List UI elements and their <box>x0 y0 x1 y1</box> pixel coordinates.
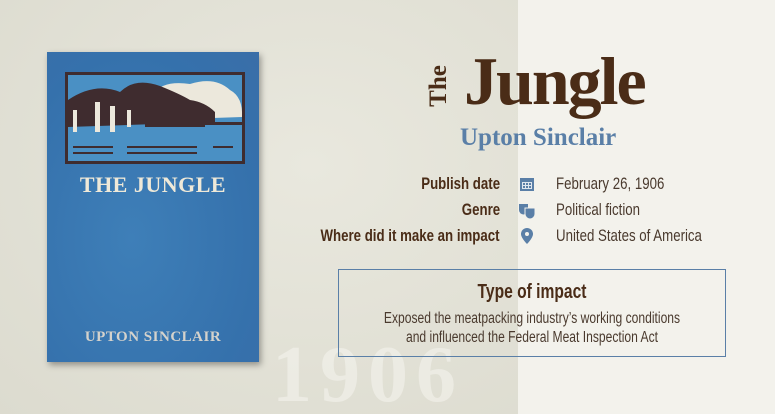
callout text: Exposed the meatpacking industry’s working conditions <box>384 310 680 327</box>
icon: theatre masks <box>519 204 534 218</box>
author: Upton Sinclair <box>460 124 616 151</box>
row: genre: Genre <box>462 200 500 219</box>
row: publish date: February 26, 1906 <box>556 174 664 193</box>
row: genre: Political fiction <box>556 200 640 219</box>
callout: type of impact <box>338 269 726 357</box>
row: genre <box>462 200 640 219</box>
row: where: United States of America <box>556 226 702 245</box>
book cover <box>47 52 259 362</box>
background left panel <box>0 0 518 414</box>
row: where <box>320 226 702 245</box>
cover author: UPTON SINCLAIR <box>85 329 221 345</box>
cover illustration: factory <box>65 72 245 164</box>
callout text <box>384 310 680 346</box>
row: publish date: Publish date <box>421 174 500 193</box>
callout text: and influenced the Federal Meat Inspection Act <box>406 329 658 346</box>
icon: calendar <box>520 178 534 191</box>
row: publish date <box>421 174 664 193</box>
title <box>425 43 645 119</box>
title main: Jungle: Jungle <box>464 43 645 119</box>
callout heading: Type of impact <box>478 281 586 303</box>
cover title: THE JUNGLE <box>80 172 226 197</box>
info rows <box>320 174 702 245</box>
icon: location pin <box>521 228 533 244</box>
row: where: Where did it make an impact <box>321 226 500 245</box>
title small: The: The <box>425 65 452 107</box>
